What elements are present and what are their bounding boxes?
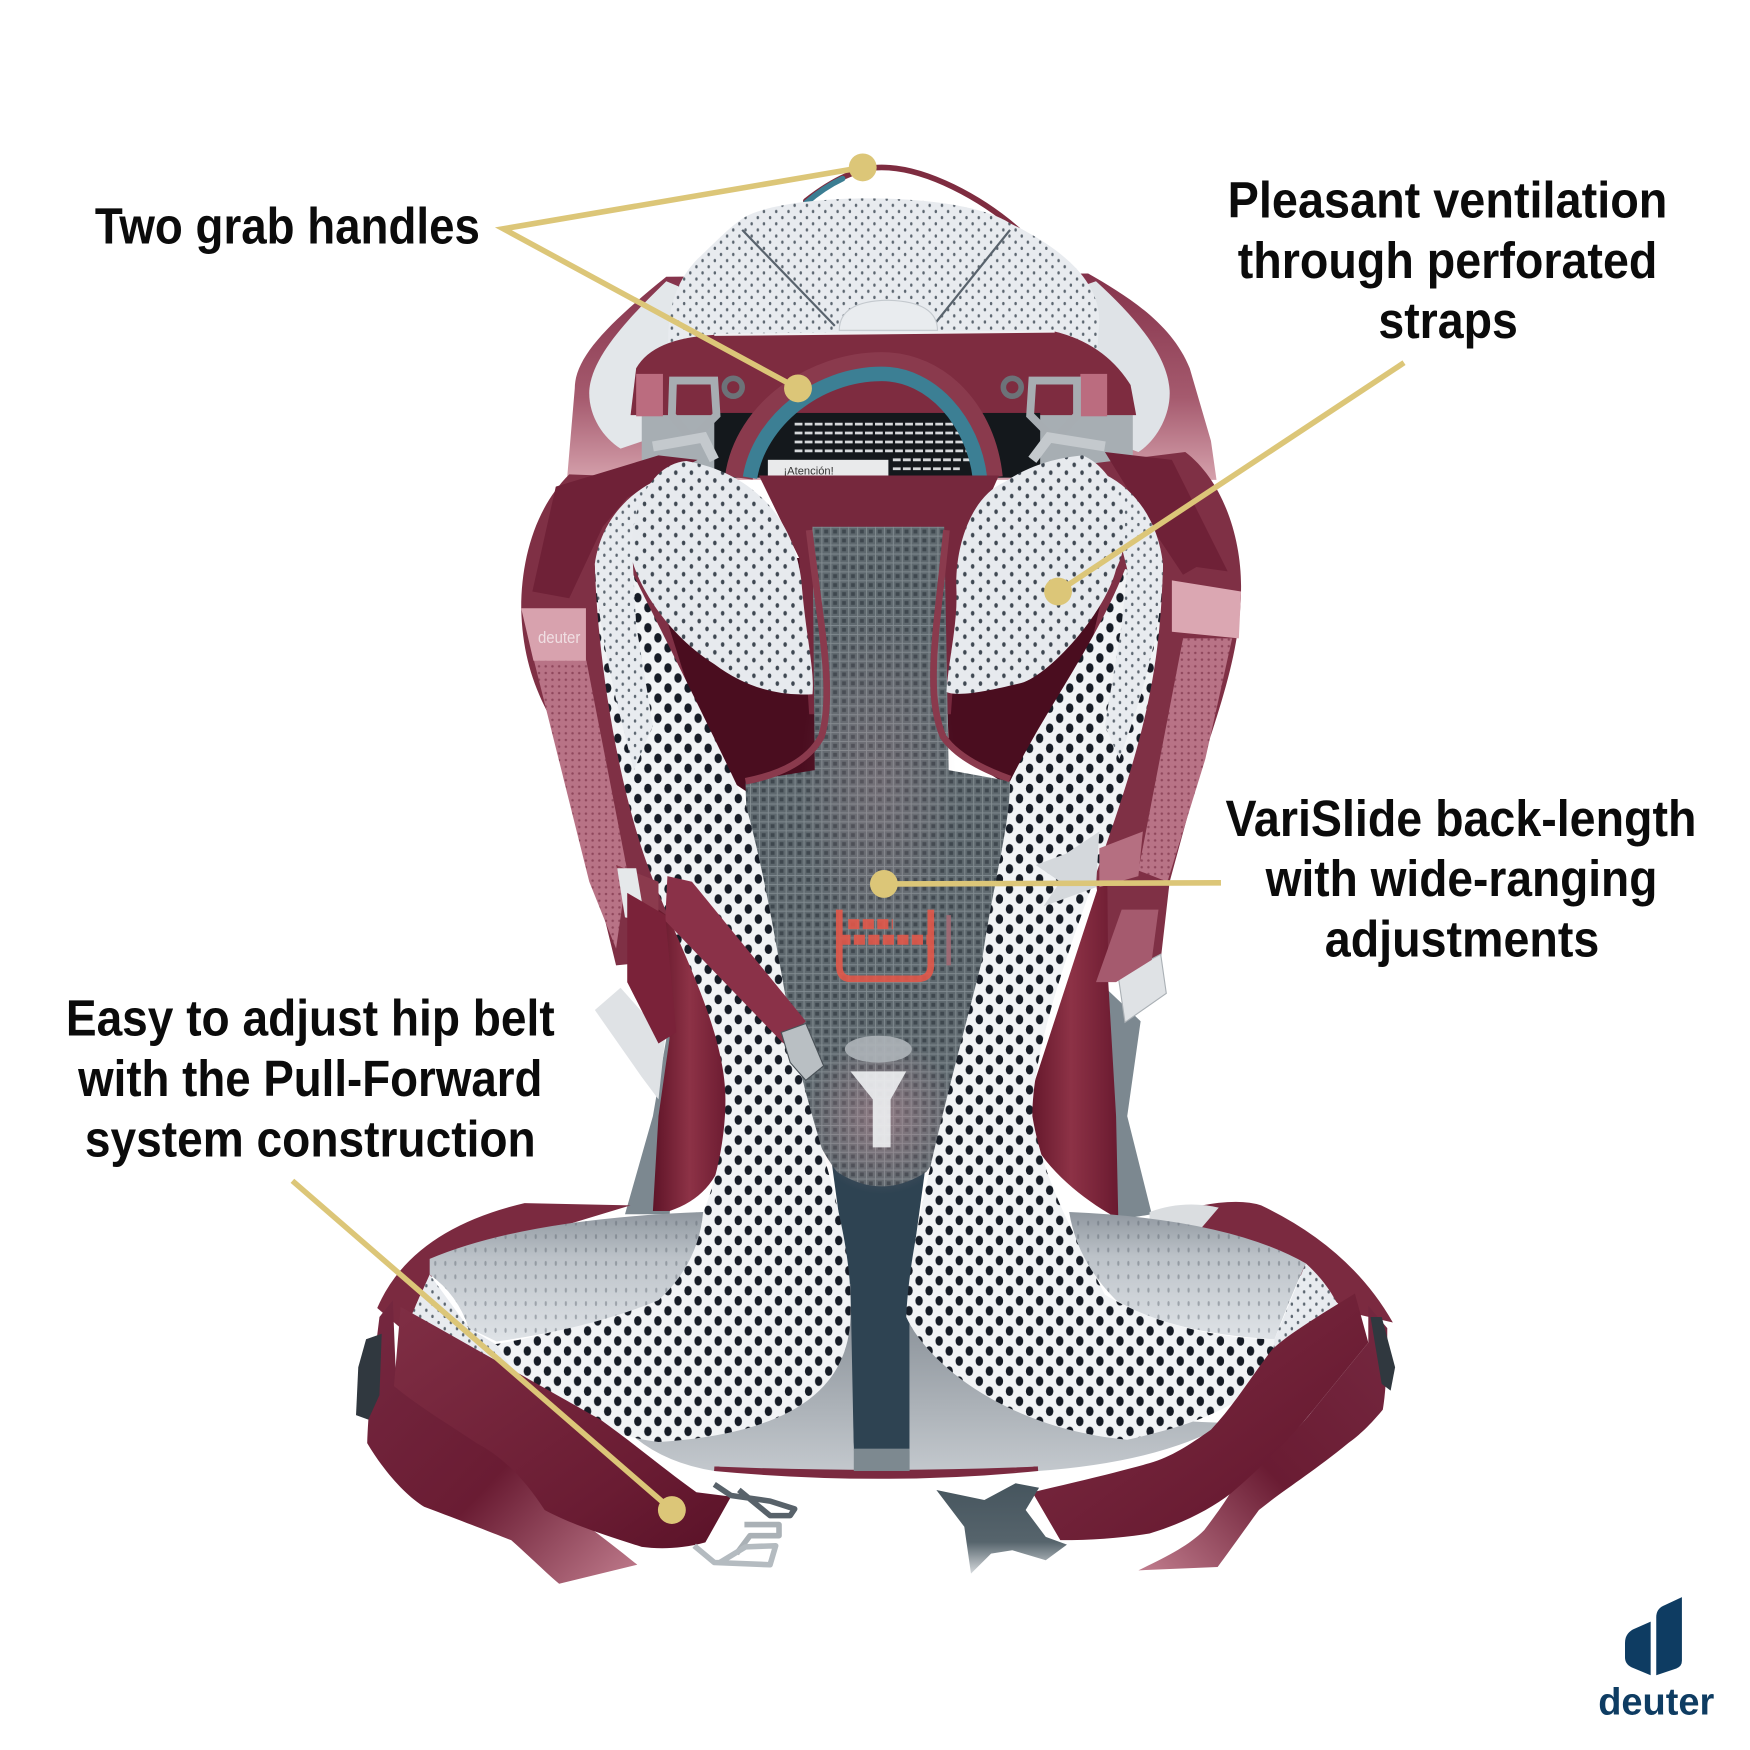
- left shoulder strap and hip mesh: [446, 564, 851, 1442]
- warning label: [714, 413, 1040, 480]
- leader line hip belt: [292, 1181, 672, 1510]
- white logo mark on mesh: [845, 1036, 912, 1147]
- text: hip belt: [66, 990, 555, 1167]
- text: hip belt: system construction: [85, 1110, 536, 1167]
- top grab handle: [806, 167, 1018, 230]
- side pad strip left: [627, 893, 676, 1044]
- text: hip belt: with the Pull-Forward: [77, 1050, 542, 1107]
- text: ventilation: straps: [1378, 292, 1518, 349]
- hip fin right: [1150, 1202, 1393, 1323]
- text: varislide: VariSlide back-length: [1225, 790, 1696, 847]
- text: varislide: [1225, 790, 1696, 967]
- brand logo: [1598, 1597, 1715, 1723]
- text: ventilation: through perforated: [1238, 232, 1657, 289]
- side clips: [356, 1317, 1395, 1420]
- warning label: ¡Atención!: [783, 465, 834, 477]
- spine: [831, 1161, 926, 1451]
- marker dot top handle: [849, 153, 877, 181]
- text: varislide: with wide-ranging: [1265, 850, 1657, 907]
- upper frame band: [631, 331, 1136, 474]
- strap light lining right: [1105, 474, 1163, 759]
- headrest mesh pad: [668, 198, 1099, 368]
- callout: varislide: [870, 790, 1696, 967]
- hip pad left: [430, 1212, 703, 1342]
- upper pad left: [632, 461, 813, 695]
- text: ventilation: Pleasant ventilation: [1228, 172, 1667, 229]
- padded torso panel left: [651, 904, 729, 1211]
- lumbar grey cushion: [625, 1283, 1228, 1477]
- hip pad left side mesh: [411, 1275, 536, 1406]
- marker dot inner handle: [784, 374, 812, 402]
- leader line ventilation: [1058, 363, 1404, 592]
- logo wordmark: deuter: [1598, 1681, 1715, 1723]
- upper pad right: [946, 455, 1125, 694]
- text: hip belt: Easy to adjust hip belt: [66, 990, 555, 1047]
- side logo text: deuter: [538, 628, 581, 647]
- logo mark: [1625, 1597, 1682, 1675]
- leader line varislide: [884, 883, 1221, 884]
- right shoulder strap and hip mesh: [906, 564, 1330, 1440]
- neck band: [759, 475, 999, 714]
- side buckle left: [595, 988, 665, 1099]
- text: ventilation: [1228, 172, 1667, 349]
- wing lining left: [589, 281, 714, 449]
- hip belt right: [1032, 1294, 1368, 1540]
- leader lines to handles: [503, 167, 863, 388]
- hip belt tail left: [367, 1300, 637, 1584]
- side buckle right: [1118, 954, 1166, 1022]
- hip belt tail right: [1138, 1306, 1387, 1570]
- load-adjuster strap left: [616, 865, 824, 1080]
- text: varislide: adjustments: [1325, 910, 1599, 967]
- pack body side panels: [521, 452, 1241, 965]
- teal inner grab handle: [739, 366, 989, 478]
- callout: two grab handles: [95, 153, 877, 402]
- grey side webbing: [625, 982, 1152, 1221]
- interior dark recess: [647, 536, 1116, 804]
- hip fin left: [377, 1203, 631, 1334]
- side wings of head shell: [567, 273, 1217, 480]
- marker dot hip belt: [658, 1496, 686, 1524]
- central back mesh: [746, 527, 1010, 1194]
- mesh pink tint upper: [800, 603, 956, 960]
- red back-length marker: [839, 910, 949, 979]
- backpack illustration: [356, 167, 1395, 1584]
- strap light lining left: [595, 474, 670, 770]
- callout: hip belt: [66, 990, 686, 1524]
- buckle female: [694, 1484, 795, 1565]
- wing lining right: [1038, 281, 1170, 452]
- buckle male: [936, 1483, 1067, 1574]
- padded torso panel right: [1023, 859, 1118, 1219]
- load-adjuster clip right: [1036, 831, 1143, 906]
- mesh pink tint lower: [804, 1038, 960, 1194]
- hip pad right side mesh: [1267, 1263, 1339, 1406]
- side pad strip right: [1096, 910, 1158, 982]
- shoulder webbing left: [532, 455, 698, 598]
- callout: pleasant ventilation: [1044, 172, 1667, 605]
- heading: two grab handles: Two grab handles: [95, 197, 480, 254]
- marker dot ventilation: [1044, 578, 1072, 605]
- metal buckles on frame: [653, 378, 1105, 460]
- hip pad right: [1069, 1212, 1306, 1339]
- shoulder webbing right: [1105, 452, 1228, 575]
- marker dot varislide: [870, 870, 898, 898]
- hip belt left: [394, 1307, 731, 1548]
